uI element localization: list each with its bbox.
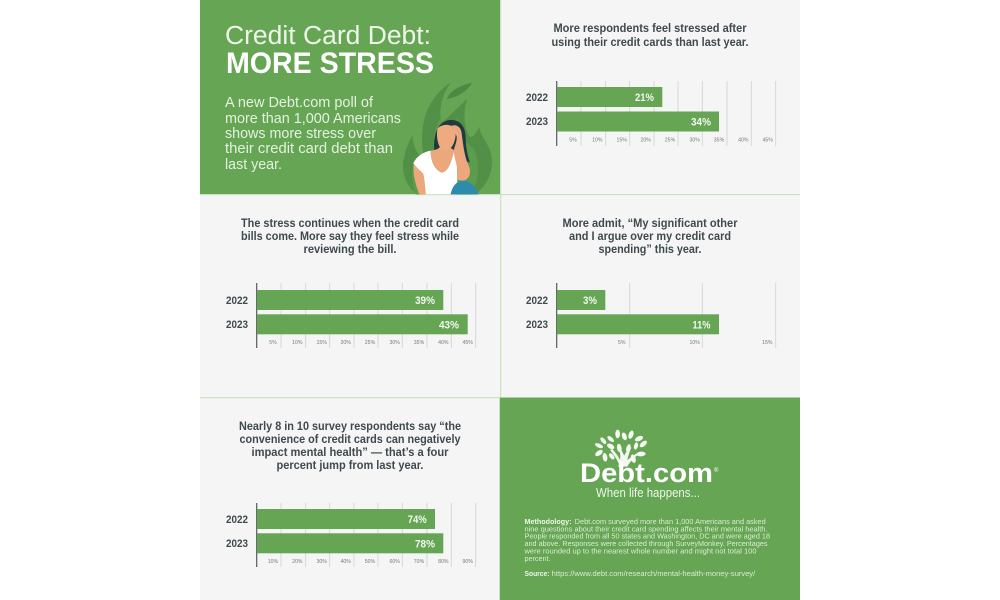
methodology text: People responded from all 50 states and Washington, DC and were aged 18 — [524, 534, 770, 541]
bar chart: 30% — [690, 138, 700, 144]
bar chart: 40% — [738, 138, 749, 144]
bar chart: 74% — [408, 514, 427, 526]
bar chart — [526, 81, 776, 146]
bar chart: 15% — [617, 138, 627, 144]
panel: intro — [200, 0, 500, 194]
logo wordmark: ® — [714, 467, 719, 474]
bar chart: 2023 — [526, 116, 548, 128]
bar chart: 40% — [438, 340, 449, 346]
bar chart: 80% — [438, 559, 449, 565]
intro text: their credit card debt than — [225, 141, 393, 157]
bar chart: 45% — [763, 138, 773, 144]
woman's jeans — [451, 181, 479, 194]
heading: spending” this year. — [598, 243, 702, 256]
woman's raised arm — [450, 125, 470, 181]
heading: and I argue over my credit card — [569, 230, 731, 243]
bar chart: 34% — [691, 116, 711, 128]
title: MORE STRESS — [226, 47, 434, 80]
woman's hair — [434, 120, 470, 163]
heading: reviewing the bill. — [304, 243, 396, 256]
bar chart: 10% — [690, 340, 700, 346]
icon: stressed woman in front of flames — [403, 82, 492, 194]
icon: Debt.com tree — [594, 430, 648, 467]
bar chart: 40% — [341, 559, 351, 565]
bar chart: 15% — [762, 340, 773, 346]
bar chart: 15% — [317, 340, 327, 346]
bar chart: 20% — [641, 138, 651, 144]
heading — [239, 420, 462, 472]
methodology text: and above. Responses were collected through SurveyMonkey. Percentages — [524, 541, 768, 548]
bar chart — [226, 283, 476, 348]
bar chart: 2023 — [226, 538, 248, 550]
bar chart: 2022 — [526, 92, 548, 104]
woman's face — [437, 125, 456, 152]
bar chart: 30% — [390, 340, 400, 346]
methodology text: nine questions about their credit card spending affects their mental health. — [524, 526, 768, 533]
logo wordmark: Debt.com — [580, 458, 713, 488]
intro text — [225, 95, 401, 173]
bar chart: 50% — [365, 559, 376, 565]
methodology text: were rounded up to the nearest whole number and might not total 100 — [523, 548, 757, 556]
methodology text — [523, 519, 770, 563]
bar chart: 25% — [365, 340, 376, 346]
tagline: When life happens... — [596, 485, 700, 500]
intro text: last year. — [225, 157, 282, 173]
bar chart: 10% — [292, 340, 303, 346]
methodology text: percent. — [524, 556, 551, 563]
bar chart: 43% — [439, 319, 459, 331]
source: https://www.debt.com/research/mental-health-money-survey/ — [552, 571, 755, 578]
bar chart: 30% — [317, 559, 327, 565]
bar chart: 2023 — [526, 319, 548, 331]
bar chart: 60% — [390, 559, 400, 565]
methodology text: Debt.com surveyed more than 1,000 Americans and asked — [575, 519, 766, 526]
panel: stress reviewing the bill — [226, 217, 476, 348]
bar chart: 5% — [269, 340, 277, 346]
bar chart — [226, 503, 476, 567]
bar chart: 35% — [714, 138, 725, 144]
heading — [562, 217, 738, 256]
woman's shirt — [413, 150, 457, 194]
intro text: A new Debt.com poll of — [225, 95, 374, 111]
heading: Nearly 8 in 10 survey respondents say “the — [239, 420, 462, 433]
bar chart: 70% — [414, 559, 425, 565]
heading: percent jump from last year. — [276, 459, 424, 472]
heading: More admit, “My significant other — [562, 217, 738, 230]
methodology text: Methodology: — [524, 519, 572, 526]
bar chart: 45% — [463, 340, 473, 346]
title: Credit Card Debt: — [225, 22, 431, 50]
bar chart: 35% — [414, 340, 425, 346]
panel: stress after using cards — [526, 22, 776, 146]
heading: using their credit cards than last year. — [552, 36, 748, 49]
bar chart: 20% — [292, 559, 303, 565]
heading: The stress continues when the credit card — [241, 217, 459, 230]
bar chart: 2022 — [526, 295, 548, 307]
bar chart: 25% — [665, 138, 676, 144]
title — [225, 22, 434, 80]
woman's chest and neck — [431, 146, 454, 173]
bar chart — [526, 283, 776, 348]
bar chart: 90% — [463, 559, 473, 565]
bar chart: 5% — [569, 138, 577, 144]
bar chart: 5% — [618, 340, 626, 346]
bar chart: 10% — [592, 138, 603, 144]
intro text: shows more stress over — [225, 126, 376, 142]
panel: arguments with significant other — [526, 217, 776, 348]
woman's left arm — [413, 164, 426, 194]
bar chart: 78% — [415, 538, 435, 550]
bar chart: 3% — [583, 295, 597, 307]
bar chart: 11% — [692, 319, 711, 331]
source: Source: — [524, 571, 550, 578]
bar chart: 20% — [341, 340, 351, 346]
bar chart: 21% — [635, 92, 654, 104]
bar chart: 2022 — [226, 295, 248, 307]
bar chart: 2022 — [226, 514, 248, 526]
panel: logo and methodology — [500, 398, 800, 600]
intro text: more than 1,000 Americans — [225, 111, 401, 127]
heading: More respondents feel stressed after — [554, 22, 747, 35]
panel: convenience and mental health — [226, 420, 476, 567]
heading: bills come. More say they feel stress while — [241, 230, 460, 243]
bar chart: 39% — [415, 295, 435, 307]
heading: impact mental health” — that’s a four — [252, 446, 449, 459]
bar chart: 2023 — [226, 319, 248, 331]
heading — [552, 22, 748, 49]
heading — [241, 217, 460, 256]
heading: convenience of credit cards can negatively — [240, 433, 461, 446]
bar chart: 10% — [268, 559, 279, 565]
